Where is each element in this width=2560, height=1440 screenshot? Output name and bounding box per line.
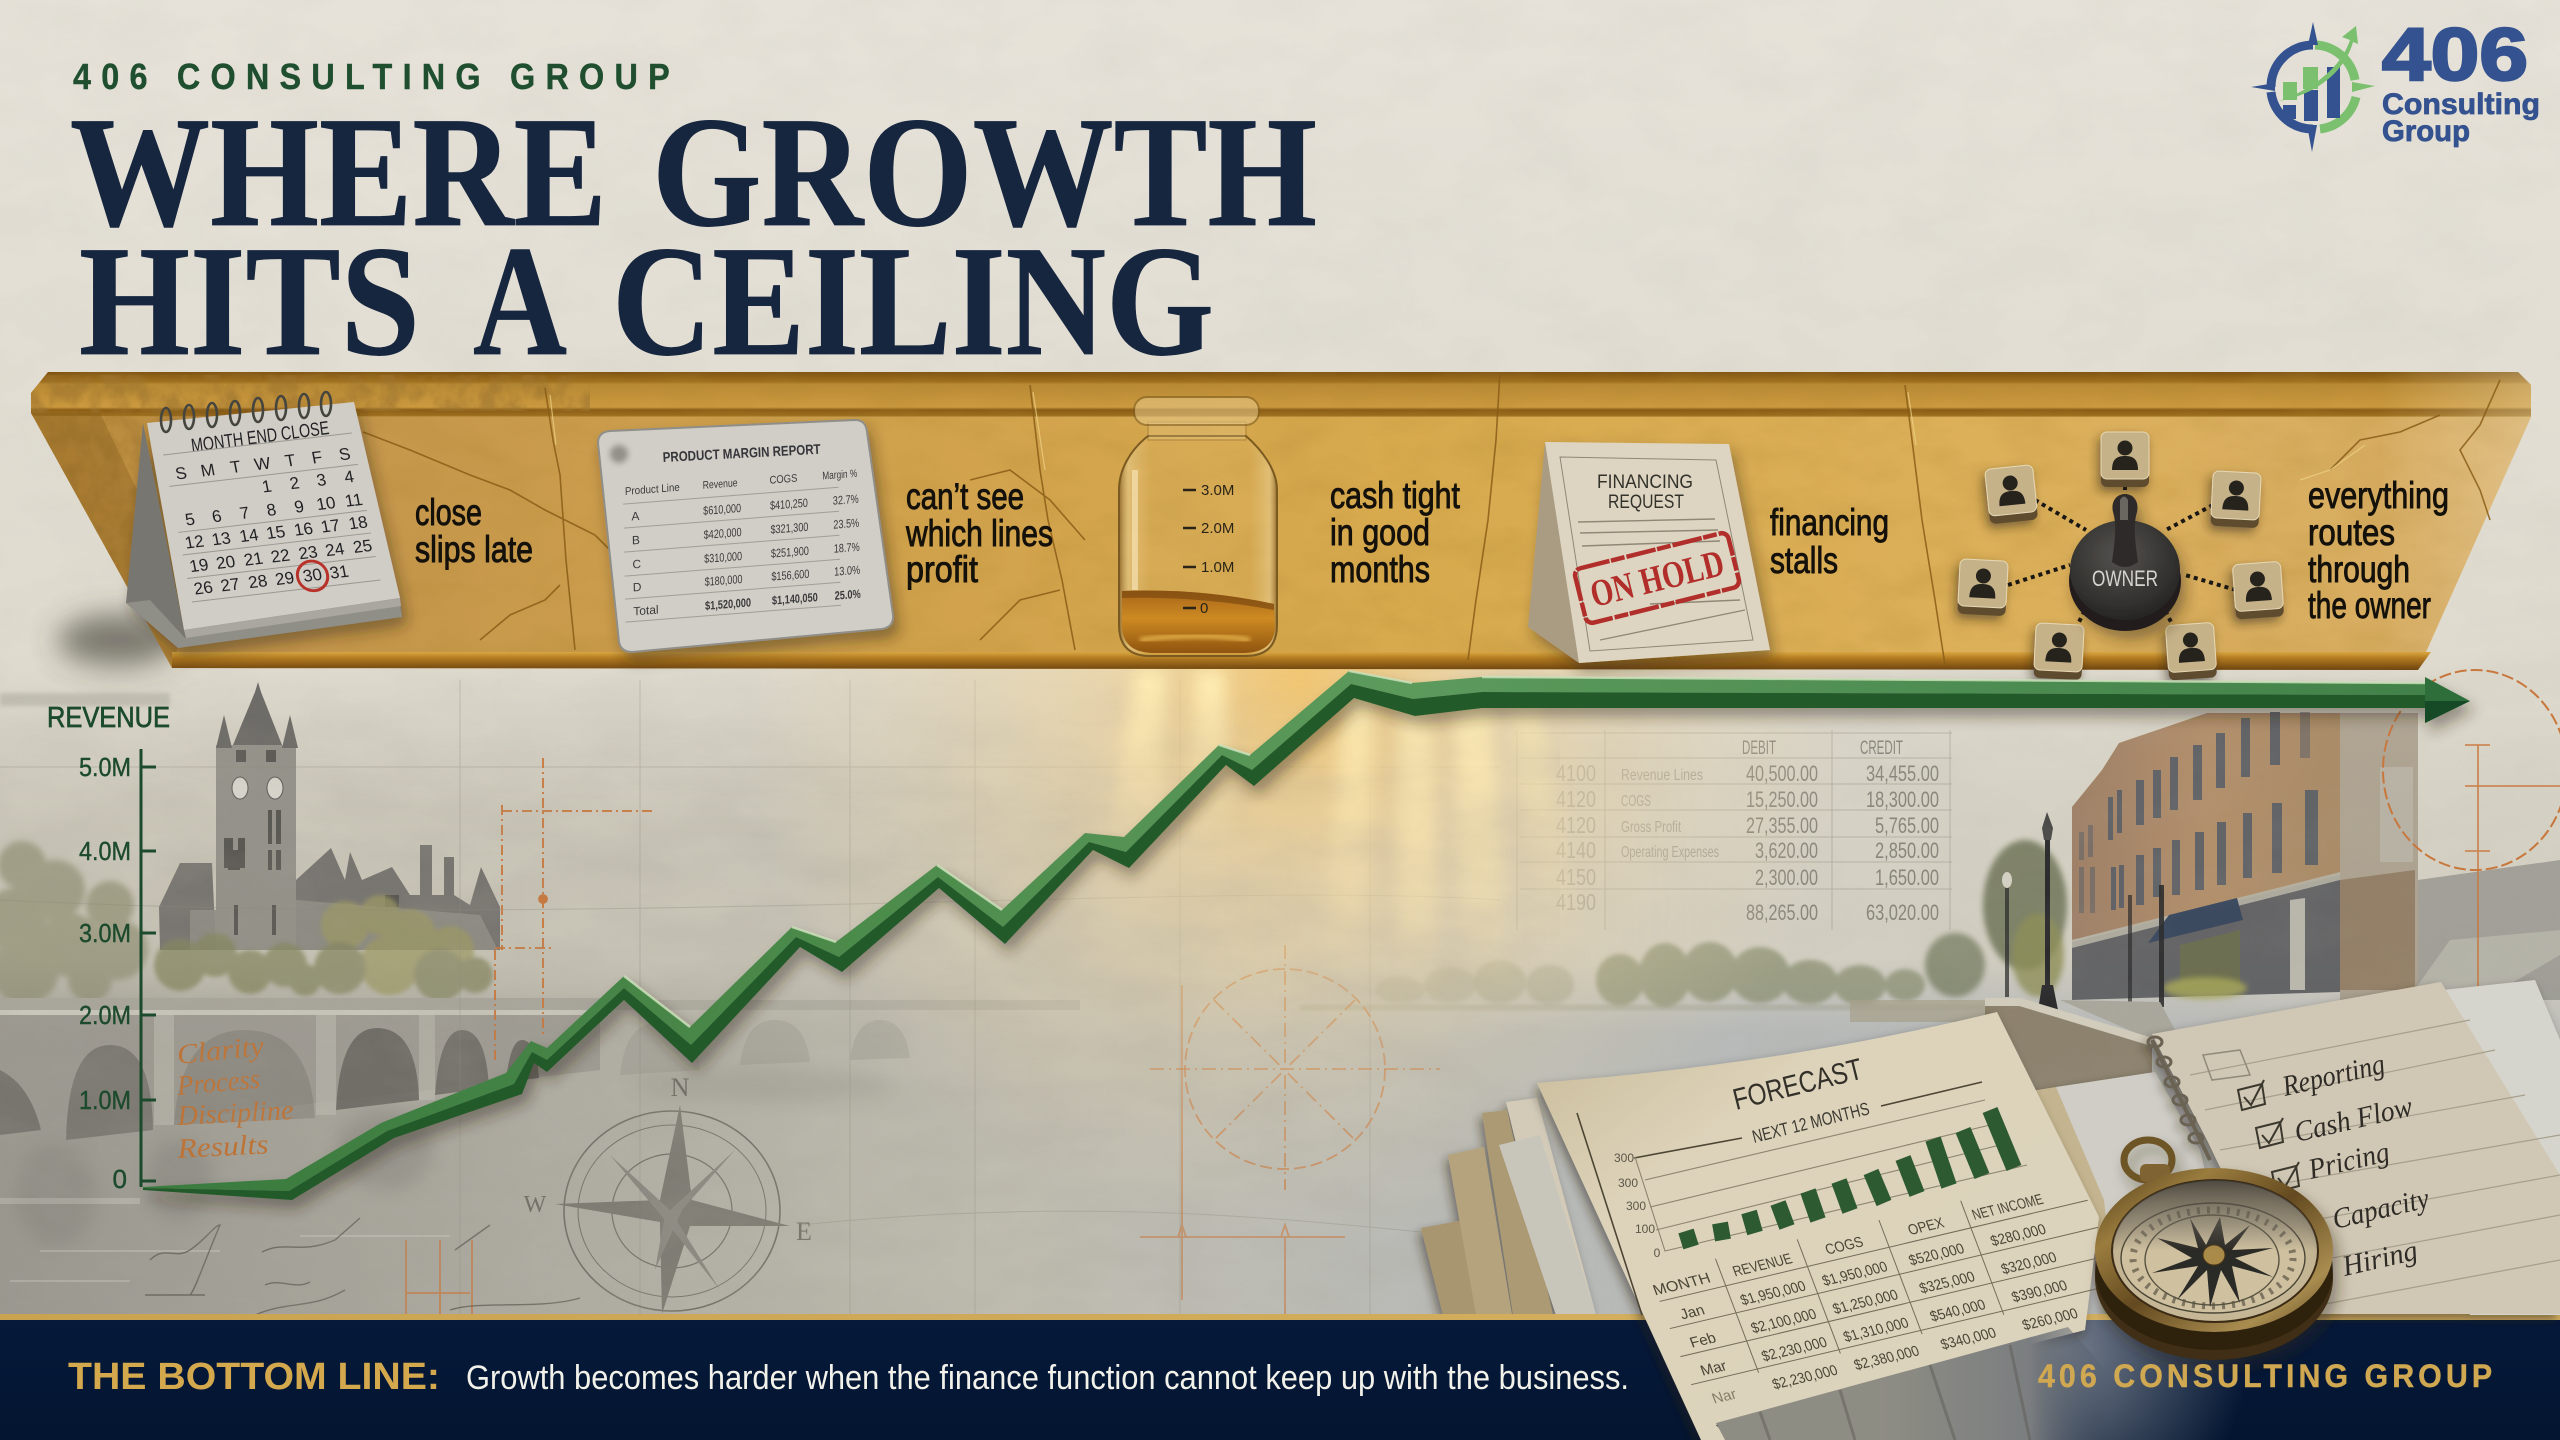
calendar date grid: 13 (210, 529, 232, 549)
label: cash tight in good months: cash tight (1330, 475, 1461, 516)
item 3: glass jar gauge (1119, 397, 1277, 656)
forecast table: $1,950,000 (1820, 1259, 1890, 1290)
financing request heading: FINANCING (1597, 472, 1693, 493)
footer: brand: 406 CONSULTING GROUP (2038, 1358, 2492, 1394)
report table: $1,520,000 (705, 595, 751, 613)
neighbouring buildings (2340, 713, 2418, 1000)
report table: $180,000 (704, 572, 743, 589)
label: close slips late (415, 492, 533, 570)
compass rose sketch: N (671, 1073, 690, 1102)
notebook ruled lines (2190, 1020, 2560, 1305)
calendar date grid: 31 (328, 562, 350, 583)
logo: wordmark (2382, 13, 2540, 148)
report table: 18.7% (834, 540, 860, 556)
line lower face (143, 684, 2425, 1200)
report table: C (632, 557, 641, 572)
arrow head (2425, 677, 2470, 723)
notebook checklist: Capacity (2329, 1183, 2432, 1236)
forecast table: NET INCOME (1970, 1191, 2046, 1224)
ledger watermark table (1517, 730, 1952, 930)
forecast bar chart (1614, 1100, 2027, 1260)
forecast sheet: NEXT 12 MONTHS (1750, 1098, 1871, 1147)
label: close slips late: slips late (415, 529, 533, 570)
forecast bar chart: 100 (1635, 1222, 1655, 1236)
scene: brick storefronts (1925, 712, 2560, 1000)
report table: 32.7% (833, 492, 859, 508)
compass rose sketch: W (524, 1192, 547, 1218)
calendar date grid: T (283, 451, 297, 471)
calendar date grid: 1 (260, 477, 273, 496)
forecast table: $390,000 (2009, 1277, 2070, 1306)
ledger watermark table: COGS (1621, 793, 1651, 810)
financing request heading (1597, 472, 1693, 513)
paper stack behind forecast (1421, 1098, 1596, 1315)
label: cash tight in good months: in good (1330, 512, 1430, 553)
calendar date grid: 14 (238, 525, 260, 546)
label: financing stalls: financing (1770, 502, 1889, 543)
calendar date grid: 29 (273, 568, 296, 589)
scene: front trees (154, 895, 493, 1001)
light glow under ceiling (700, 668, 1900, 1248)
hub dashed connectors (2008, 478, 2236, 636)
calendar date grid: 27 (219, 575, 241, 595)
label: financing stalls: stalls (1770, 540, 1838, 581)
jar scale (1183, 482, 1234, 617)
title: HITS (79, 214, 420, 389)
notebook spiral (2148, 1037, 2210, 1160)
handwritten values note: Process (175, 1064, 261, 1102)
forecast bar chart: 300 (1618, 1176, 1638, 1190)
report table: A (631, 509, 640, 524)
forecast table: OPEX (1905, 1215, 1947, 1239)
axis tick labels: 1.0M (79, 1085, 131, 1115)
footer text (68, 1356, 2492, 1398)
jar scale: 0 (1200, 600, 1208, 617)
item 5: owner bottleneck hub (1957, 432, 2284, 681)
report table: $156,600 (771, 567, 810, 584)
forecast sheet (1537, 1012, 2129, 1440)
scene: left trees (0, 841, 148, 1004)
forecast table: REVENUE (1730, 1251, 1795, 1280)
ledger watermark table: 40,500.00 (1746, 761, 1818, 786)
title: WHERE (70, 85, 607, 260)
notebook (2148, 980, 2560, 1315)
handwritten values note: Results (176, 1129, 269, 1165)
calendar date grid: 20 (215, 552, 237, 573)
ledger watermark table: Gross Profit (1621, 819, 1681, 836)
calendar date grid: 4 (343, 467, 356, 487)
label: cannot see which lines profit: which lines (905, 513, 1053, 554)
forecast table: $320,000 (1999, 1249, 2059, 1278)
calendar heading: MONTH END CLOSE (190, 418, 330, 457)
ledger watermark table: 88,265.00 (1746, 900, 1818, 925)
title: GROWTH (652, 85, 1317, 260)
label: everything routes through the owner: routes (2308, 512, 2395, 553)
compass rose sketch (524, 1073, 812, 1314)
forecast table: $2,380,000 (1852, 1343, 1922, 1374)
jar liquid (1122, 591, 1275, 653)
notebook checklist (2203, 1048, 2432, 1283)
blueprint drafting marks (406, 670, 2560, 1314)
ledger watermark table: 4150 (1556, 864, 1596, 890)
ledger watermark table: 4190 (1556, 889, 1596, 915)
forecast table: $340,000 (1938, 1325, 1999, 1353)
axis tick labels: 5.0M (79, 752, 131, 782)
label: everything routes through the owner: the owner (2308, 585, 2431, 626)
calendar date grid: 18 (347, 513, 369, 533)
notebook checklist: Cash Flow (2291, 1091, 2416, 1149)
notebook checklist: Pricing (2304, 1136, 2392, 1186)
calendar date grid: M (199, 460, 217, 480)
ledge: mottled texture (0, 370, 2560, 672)
line upper face (143, 671, 2425, 1191)
forecast heading: FORECAST (1730, 1053, 1866, 1117)
calendar date grid: 2 (288, 473, 301, 493)
storefront level (2072, 875, 2340, 1000)
scene: stone bridge (0, 998, 1080, 1140)
calendar date grid: T (229, 457, 243, 477)
forecast bar chart: 300 (1614, 1151, 1634, 1165)
ledger watermark table: 3,620.00 (1755, 838, 1818, 863)
forecast table: $280,000 (1988, 1221, 2049, 1250)
report table: $610,000 (703, 501, 741, 518)
handwritten values note (175, 1031, 294, 1165)
revenue growth line hitting ceiling (143, 671, 2470, 1200)
logo (2251, 13, 2540, 152)
ledger watermark table: 2,300.00 (1755, 865, 1818, 890)
footer: bottom line label: THE BOTTOM LINE: (68, 1356, 440, 1398)
street trees (1983, 840, 2067, 970)
ledger watermark table: DEBIT (1742, 738, 1776, 759)
calendar date grid: W (253, 454, 272, 474)
report table (623, 468, 861, 622)
report table: $410,250 (770, 496, 808, 513)
axis tick labels: 4.0M (79, 836, 131, 866)
calendar date grid: 28 (247, 571, 269, 592)
handwritten values note: Clarity (175, 1031, 266, 1071)
owner puck and knob: OWNER (2092, 566, 2158, 591)
tower clocks (232, 777, 283, 799)
forecast table: $520,000 (1906, 1240, 1967, 1269)
report table: Revenue (703, 477, 738, 492)
calendar date grid: 26 (192, 578, 215, 599)
brick building (2072, 713, 2340, 940)
logo: wordmark: Consulting (2382, 88, 2540, 121)
bridge fading to the east (600, 1000, 1080, 1075)
logo: wordmark: Group (2382, 115, 2470, 148)
forecast table (1647, 1173, 2129, 1411)
ledger watermark table: 4120 (1556, 786, 1596, 812)
calendar date grid: 7 (238, 503, 251, 523)
scene: river promenade and balustrade (2060, 1000, 2175, 1040)
forecast bar chart: 0 (1654, 1246, 1661, 1260)
calendar date grid: 3 (315, 470, 328, 490)
ledger watermark table: CREDIT (1860, 738, 1903, 759)
title: CEILING (612, 214, 1214, 389)
title (70, 85, 1317, 389)
papers behind compass (2025, 1072, 2240, 1315)
item 1: calendar (126, 392, 402, 648)
label: cannot see which lines profit: can’t see (906, 476, 1024, 517)
report table: $251,900 (771, 544, 809, 561)
stamp: on hold: ON HOLD (1586, 542, 1728, 616)
ledger watermark table: Revenue Lines (1621, 767, 1703, 784)
item 4: financing request card (1528, 442, 1770, 663)
compass dial (2121, 1203, 2305, 1313)
forecast bottom photo strip (1716, 1327, 2115, 1440)
ledger watermark table: 4140 (1556, 837, 1596, 863)
report table: 25.0% (835, 587, 861, 603)
compass ring (2124, 1140, 2172, 1180)
axis tick labels: 2.0M (79, 1000, 131, 1030)
footer band (0, 1314, 2560, 1440)
label: cash tight in good months (1330, 475, 1461, 590)
axis title: REVENUE (47, 702, 170, 734)
report table: Product Line (625, 482, 680, 498)
hub tiles (1957, 432, 2284, 681)
forecast table: COGS (1823, 1234, 1866, 1258)
ledger watermark table: 2,850.00 (1875, 838, 1939, 863)
report table: Margin % (822, 468, 858, 483)
report table: 23.5% (833, 516, 860, 532)
calendar date grid: 25 (351, 536, 374, 557)
eyebrow: company name: 406 CONSULTING GROUP (73, 57, 670, 97)
calendar date grid: 12 (183, 532, 206, 553)
axis tick labels (79, 752, 131, 1194)
report table: 13.0% (834, 563, 861, 579)
notebook checklist: Hiring (2338, 1235, 2421, 1283)
ledger watermark table: 4120 (1556, 812, 1596, 838)
handwritten values note: Discipline (176, 1095, 294, 1132)
ledge: marble cracks (363, 372, 2500, 665)
brass pocket compass (2095, 1140, 2333, 1360)
handwritten scribbles (145, 1218, 580, 1315)
forecast table: MONTH (1651, 1270, 1713, 1299)
calendar date grid: 22 (269, 546, 291, 567)
title: A (473, 214, 567, 389)
report table: $1,140,050 (772, 590, 818, 608)
ledger watermark table: 1,650.00 (1875, 865, 1939, 890)
report table: $321,300 (770, 520, 809, 537)
calendar date grid: 10 (315, 493, 337, 514)
report heading: PRODUCT MARGIN REPORT (662, 441, 821, 465)
forecast bar chart: 300 (1626, 1199, 1646, 1213)
report table: Total (633, 603, 659, 619)
calendar date grid: F (310, 448, 324, 468)
forecast table: $1,250,000 (1830, 1287, 1901, 1318)
gold ceiling ledge (0, 370, 2560, 672)
label: financing stalls (1770, 502, 1889, 581)
calendar date grid: 30 (301, 565, 324, 586)
jar scale: 2.0M (1201, 520, 1234, 537)
aged stone tint of lower half (0, 760, 1085, 988)
label: everything routes through the owner: through (2308, 549, 2410, 590)
report table: COGS (769, 473, 798, 487)
shadow below ledge at left (58, 614, 178, 666)
ledger watermark table: 4100 (1556, 760, 1596, 786)
label: cannot see which lines profit: profit (906, 549, 979, 590)
owner puck and knob (2069, 494, 2181, 631)
calendar date grid: S (337, 444, 352, 464)
label: close slips late: close (415, 492, 482, 533)
calendar date grid (163, 433, 381, 605)
calendar date grid: 15 (265, 522, 287, 543)
footer: bottom line statement: Growth becomes harder when the finance function cannot keep up with the business. (466, 1359, 1629, 1397)
ledger watermark table: Operating Expenses (1621, 844, 1719, 861)
forecast table: Feb (1687, 1330, 1719, 1352)
jar glass (1119, 436, 1277, 656)
forecast table: $2,230,000 (1759, 1334, 1830, 1365)
logo: wordmark: 406 (2382, 13, 2528, 96)
calendar date grid: 6 (210, 507, 223, 526)
notebook checklist: Reporting (2279, 1048, 2388, 1103)
scene: clock tower and castle building (159, 682, 500, 950)
jar scale: 1.0M (1201, 559, 1234, 576)
calendar date grid: 5 (184, 510, 197, 529)
scene: water reflections (15, 1067, 890, 1245)
scene: far shore trees (1376, 942, 1925, 1007)
item 2: product margin report (598, 420, 893, 652)
calendar date grid: 9 (293, 497, 306, 517)
forecast table: Jan (1678, 1302, 1707, 1323)
report table: $420,000 (704, 525, 742, 542)
stone mottling (202, 780, 1500, 1261)
forecast table: $1,310,000 (1841, 1315, 1911, 1346)
ledger watermark table: 63,020.00 (1866, 900, 1939, 925)
label: cannot see which lines profit (905, 476, 1053, 590)
label: cash tight in good months: months (1330, 549, 1430, 590)
report table: D (633, 580, 642, 595)
map grid lines (0, 680, 1500, 1314)
financing request heading: REQUEST (1608, 492, 1684, 513)
calendar date grid: 24 (324, 539, 346, 560)
ledger watermark table: 34,455.00 (1866, 761, 1939, 786)
jar scale: 3.0M (1201, 482, 1234, 499)
scene: street lamps (2002, 812, 2164, 1010)
forecast table: Nar (1709, 1386, 1739, 1407)
calendar date grid: 19 (188, 555, 210, 576)
forecast table: $2,100,000 (1749, 1306, 1819, 1337)
forecast table: Mar (1698, 1358, 1729, 1380)
calendar date grid: 17 (319, 516, 341, 537)
revenue axis (47, 702, 170, 1194)
calendar date grid: 16 (292, 519, 315, 540)
calendar stand and page (126, 423, 402, 648)
compass glass (2112, 1180, 2318, 1322)
report table: $310,000 (704, 549, 742, 566)
scene: paper stain under ledge (0, 693, 170, 706)
ledger watermark table: 15,250.00 (1746, 787, 1818, 812)
report table: B (632, 533, 640, 548)
compass case (2095, 1196, 2333, 1360)
building windows (2079, 712, 2318, 913)
ledger watermark table: 18,300.00 (1866, 787, 1939, 812)
forecast table: $1,950,000 (1738, 1278, 1808, 1309)
logo: compass mark (2251, 22, 2375, 152)
tower roof and pinnacles (216, 682, 298, 748)
compass rose sketch: E (796, 1217, 812, 1246)
forecast table: $2,230,000 (1770, 1362, 1840, 1393)
axis tick labels: 3.0M (79, 918, 131, 948)
calendar date grid: 8 (265, 500, 278, 520)
calendar date grid: S (174, 463, 189, 483)
label: everything routes through the owner: everything (2308, 475, 2449, 516)
forecast table: $540,000 (1928, 1297, 1988, 1325)
background scene: river and city watermark (0, 682, 2560, 1320)
ledger watermark table: 27,355.00 (1746, 813, 1818, 838)
calendar date grid: 11 (343, 490, 364, 511)
calendar date grid: 21 (242, 549, 265, 570)
forecast table: $260,000 (2020, 1305, 2080, 1334)
ledger watermark table: 5,765.00 (1875, 813, 1939, 838)
axis tick labels: 0 (113, 1164, 127, 1194)
forecast table: $325,000 (1917, 1268, 1977, 1297)
label: everything routes through the owner (2308, 475, 2449, 626)
calendar spiral binding (161, 392, 331, 432)
calendar date grid: 23 (297, 542, 319, 563)
